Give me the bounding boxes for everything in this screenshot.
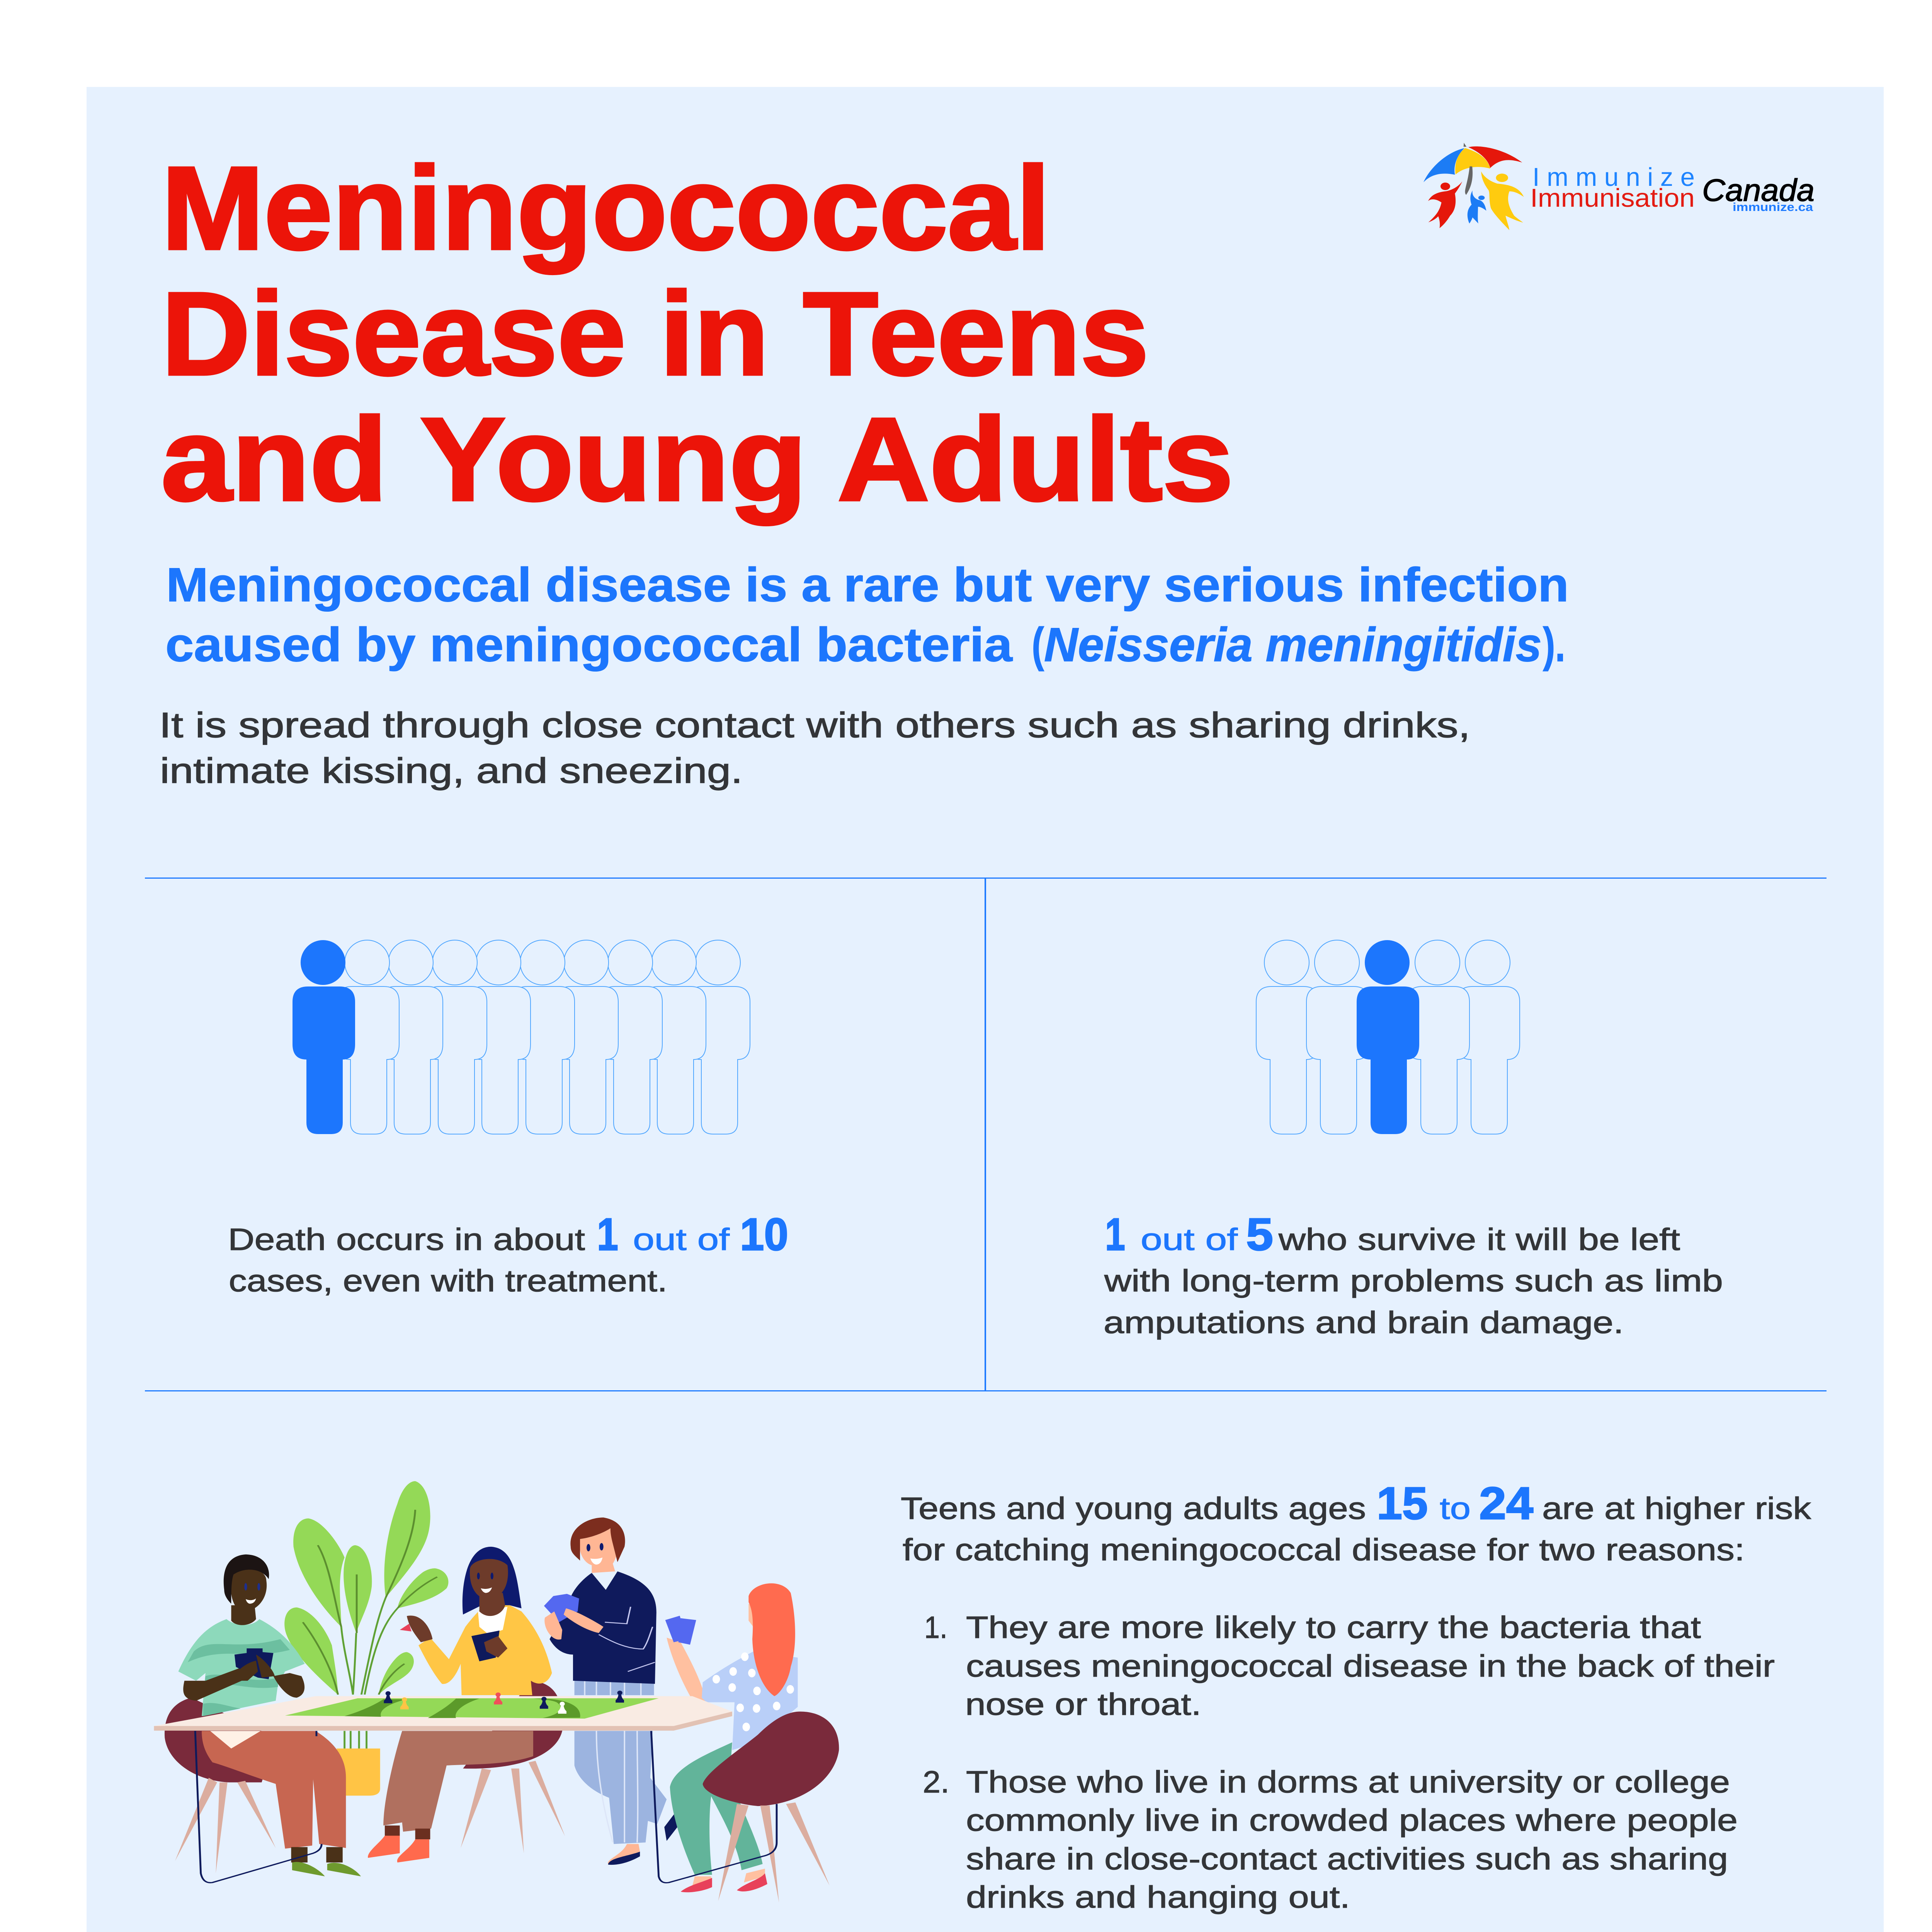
stat text: death: 1 (597, 1209, 618, 1260)
text block: why teens are at higher risk: 24 (1479, 1478, 1533, 1529)
stat text: survivors: who survive it will be left (1278, 1222, 1680, 1257)
list item 2: commonly live in crowded places where people (966, 1803, 1738, 1837)
logo: Immunize Canada: Canada (1702, 173, 1815, 208)
icon: umbrella and family (1423, 143, 1524, 230)
person: left player with green shirt (165, 1554, 361, 1876)
stat text: survivors: 1 (1105, 1209, 1125, 1260)
intro text: intimate kissing, and sneezing. (160, 751, 743, 791)
subheading: ). (1543, 618, 1565, 672)
stat text: survivors: with long-term problems such as limb (1104, 1264, 1723, 1298)
intro text (159, 706, 1470, 791)
text block: why teens are at higher risk: Teens and young adults ages (901, 1491, 1366, 1526)
stat text: survivors: amputations and brain damage. (1104, 1305, 1624, 1340)
title: and Young Adults (161, 393, 1233, 526)
title: Meningococcal (162, 142, 1050, 275)
list item 1: nose or throat. (965, 1687, 1201, 1721)
stat text: death: 10 (740, 1209, 788, 1260)
logo: Immunize Canada (1423, 143, 1815, 230)
table and board game (154, 1690, 777, 1883)
logo: Immunize Canada: Immunize (1532, 163, 1695, 192)
list item 1: 1. (924, 1610, 947, 1645)
person: player in yellow jacket (368, 1547, 565, 1862)
text block: why teens are at higher risk: 15 (1377, 1478, 1428, 1529)
list item 2: 2. (923, 1765, 949, 1799)
subheading: Meningococcal disease is a rare but very serious infection (166, 558, 1569, 612)
stat text: death: cases, even with treatment. (229, 1264, 667, 1298)
stat text: survivors (1104, 1209, 1723, 1340)
list item 2: drinks and hanging out. (966, 1880, 1350, 1914)
text block: why teens are at higher risk: to (1440, 1491, 1471, 1526)
list item 1: They are more likely to carry the bacteria that (966, 1610, 1701, 1645)
subheading: caused by meningococcal bacteria (165, 618, 1013, 672)
person: player with red hair (665, 1583, 839, 1903)
stat text: death: Death occurs in about (228, 1222, 585, 1257)
plant (284, 1481, 448, 1796)
stat text: survivors: 5 (1246, 1209, 1273, 1260)
stat text: death: out of (633, 1222, 730, 1257)
logo: Immunize Canada: Immunisation (1530, 184, 1695, 213)
title (161, 142, 1233, 526)
text block: why teens are at higher risk: for catching meningococcal disease for two reasons: (903, 1532, 1745, 1567)
subheading (165, 558, 1569, 672)
list item 2 (923, 1765, 1738, 1914)
person: standing player in navy (544, 1517, 677, 1865)
pictogram: 1 out of 10 people (293, 940, 750, 1134)
list item 1 (924, 1610, 1775, 1721)
list item 2: Those who live in dorms at university or college (966, 1765, 1730, 1799)
text block: why teens are at higher risk (901, 1478, 1811, 1914)
list item 1: causes meningococcal disease in the back of their (966, 1649, 1775, 1683)
list item 2: share in close-contact activities such as sharing (966, 1842, 1728, 1876)
illustration: friends playing a board game (154, 1481, 839, 1903)
text block: why teens are at higher risk: are at higher risk (1542, 1491, 1811, 1526)
stat text: death (228, 1209, 788, 1298)
stat text: survivors: out of (1141, 1222, 1238, 1257)
logo: Immunize Canada: immunize.ca (1733, 201, 1813, 214)
title: Disease in Teens (162, 268, 1149, 400)
subheading: ( (1032, 618, 1044, 672)
subheading: Neisseria meningitidis (1044, 618, 1542, 672)
intro text: It is spread through close contact with others such as sharing drinks, (159, 706, 1470, 745)
pictogram: 1 out of 5 people (1256, 940, 1520, 1134)
